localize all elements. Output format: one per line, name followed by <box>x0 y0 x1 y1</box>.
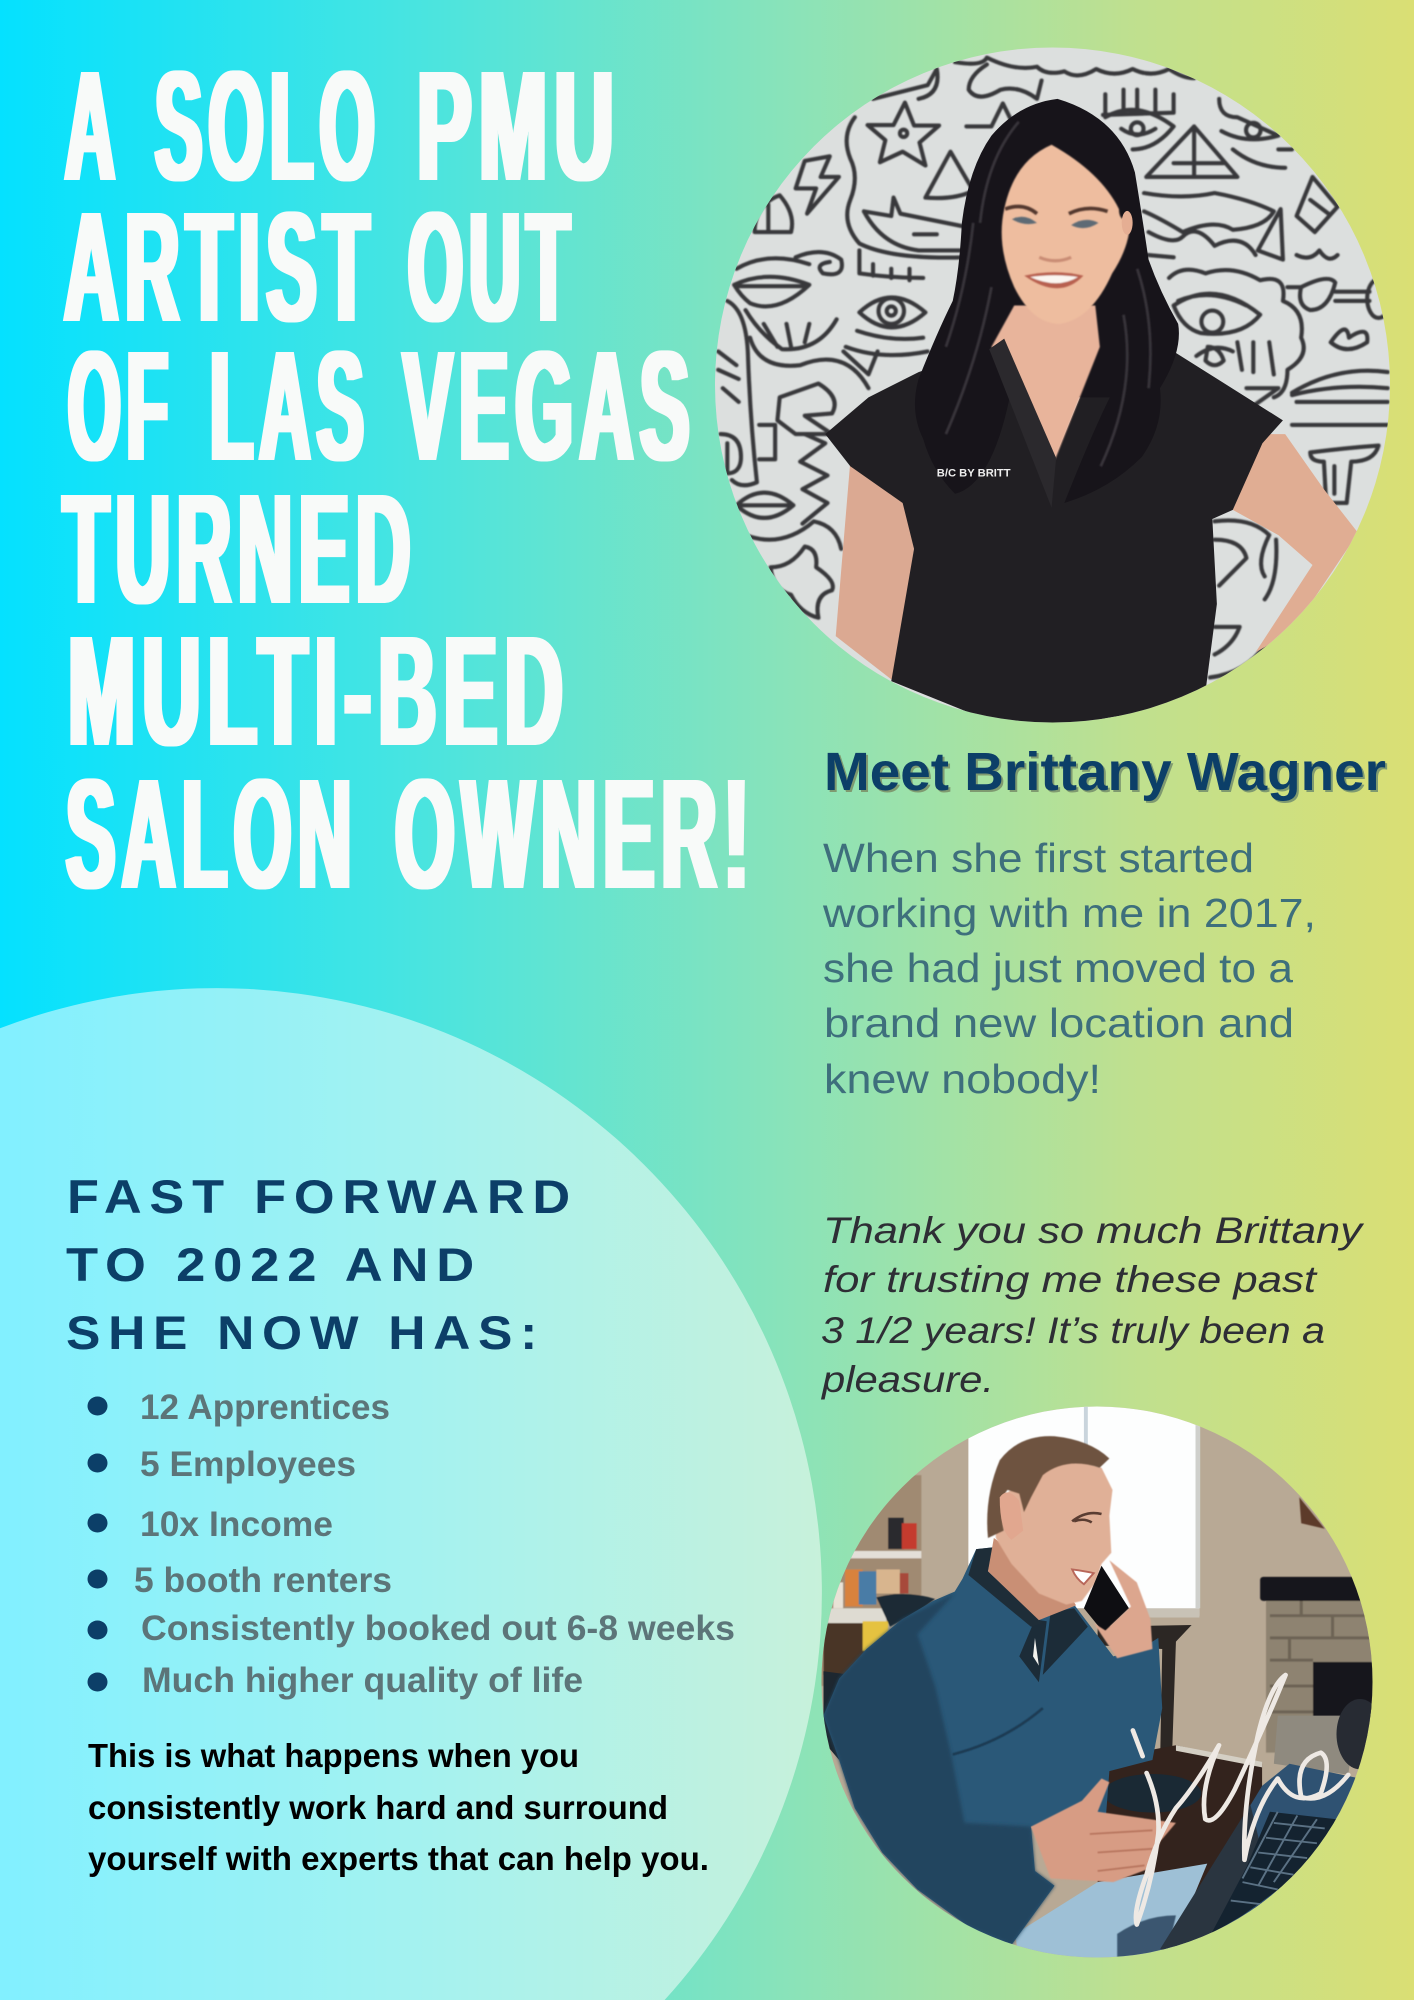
bullet list of achievements: Consistently booked out 6-8 weeks <box>141 1609 735 1648</box>
photo: Jake on the phone <box>822 1406 1372 1958</box>
shirt logo: B/C BY BRITT <box>937 467 1011 479</box>
title: TURNED <box>63 462 417 637</box>
thank-you note: pleasure. <box>821 1359 994 1400</box>
thank-you note: Thank you so much Brittany <box>823 1210 1365 1251</box>
doodle wall <box>718 58 1390 677</box>
thank-you note <box>821 1210 1365 1400</box>
bullet list of achievements: 12 Apprentices <box>140 1388 390 1427</box>
intro paragraph: When she first started <box>823 835 1254 881</box>
intro paragraph: working with me in 2017, <box>822 890 1316 936</box>
closing statement: This is what happens when you <box>88 1737 579 1774</box>
left chair <box>824 1671 844 1760</box>
title: SALON <box>66 747 358 922</box>
name heading: Meet Brittany Wagner <box>826 744 1388 804</box>
jeans <box>1015 1864 1207 1967</box>
text: OWNER! <box>395 747 756 922</box>
bookcase <box>816 1475 935 1686</box>
closing statement <box>88 1737 709 1877</box>
title: LAS <box>210 319 370 494</box>
bullet list of achievements: 10x Income <box>140 1505 333 1544</box>
title: OUT <box>408 180 576 355</box>
closing statement: yourself with experts that can help you. <box>88 1840 709 1877</box>
intro paragraph: she had just moved to a <box>823 945 1293 991</box>
side table, skirting and floor <box>1098 1625 1192 1756</box>
photo: Brittany Wagner portrait <box>715 48 1390 722</box>
title: PMU <box>417 39 621 214</box>
title: OF <box>68 319 174 494</box>
title: MULTI-BED <box>68 604 570 779</box>
fireplace <box>1260 1497 1380 1753</box>
intro paragraph: brand new location and <box>824 1000 1294 1046</box>
closing statement: consistently work hard and surround <box>88 1789 668 1826</box>
hair, back layer <box>915 99 1179 503</box>
phone and hand <box>1084 1566 1129 1632</box>
bullet list of achievements: 5 Employees <box>140 1445 356 1484</box>
face <box>1002 145 1130 324</box>
title: ARTIST <box>64 180 376 355</box>
thank-you note: for trusting me these past <box>823 1259 1318 1300</box>
title: VEGAS <box>403 319 696 494</box>
black shirt <box>825 347 1283 728</box>
signature: jake <box>1133 1675 1348 1925</box>
collar <box>1019 1608 1088 1682</box>
window <box>968 1405 1199 1616</box>
panel heading: fast forward: TO 2022 AND <box>66 1238 482 1291</box>
gesturing hand <box>1031 1778 1176 1882</box>
panel heading: fast forward: FAST FORWARD <box>67 1170 578 1223</box>
bullet list of achievements <box>88 1388 735 1700</box>
neck and chest <box>991 306 1100 459</box>
hair strands <box>946 122 1150 466</box>
title: A <box>65 39 121 214</box>
desk laptop <box>1164 1764 1356 1950</box>
panel heading: fast forward <box>66 1170 578 1359</box>
bullet list of achievements: Much higher quality of life <box>142 1661 583 1700</box>
bullet list of achievements: 5 booth renters <box>134 1561 392 1600</box>
title <box>63 39 756 922</box>
neck, face and hair <box>988 1538 1076 1620</box>
thank-you note: 3 1/2 years! It’s truly been a <box>821 1310 1325 1351</box>
ear <box>1122 211 1133 235</box>
arms <box>836 462 914 681</box>
pale circle panel <box>0 988 822 2000</box>
intro paragraph: knew nobody! <box>824 1056 1101 1102</box>
intro paragraph <box>822 835 1316 1102</box>
panel heading: fast forward: SHE NOW HAS: <box>66 1306 545 1359</box>
armrest <box>1103 1774 1201 1813</box>
fleece sweater <box>823 1547 1162 1945</box>
title: SOLO <box>155 39 381 214</box>
name heading: Meet Brittany Wagner <box>824 742 1386 802</box>
facial features <box>1005 207 1108 288</box>
